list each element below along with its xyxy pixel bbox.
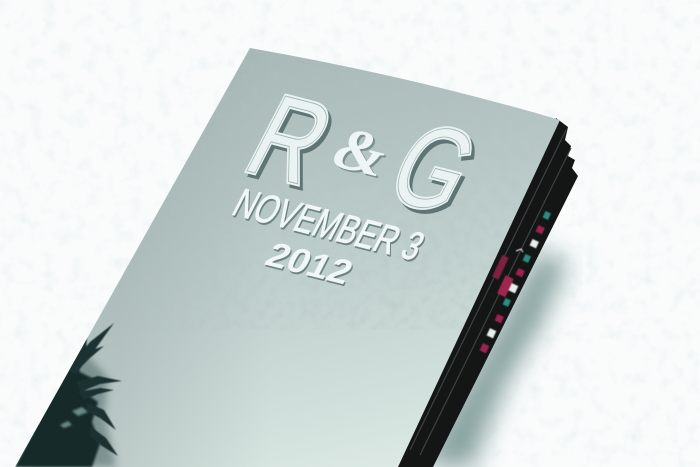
tree soft halo bbox=[30, 352, 116, 467]
letter R: R bbox=[228, 71, 352, 208]
date: 2012: 2012 bbox=[259, 235, 360, 292]
booklet front cover bbox=[15, 48, 560, 467]
letter R: R bbox=[228, 71, 352, 208]
ampersand: & bbox=[323, 116, 404, 191]
letter G: G bbox=[373, 103, 500, 241]
date: November 3: NOVEMBER 3 bbox=[226, 180, 432, 269]
date: November 3: NOVEMBER 3 bbox=[227, 182, 433, 271]
title: R & G bbox=[228, 71, 500, 241]
treetop highlights bbox=[60, 407, 88, 428]
tree spikes bbox=[66, 323, 122, 456]
coloured page tabs bbox=[480, 211, 551, 353]
letter R: R bbox=[231, 75, 355, 212]
letter G: G bbox=[370, 99, 497, 237]
page edge lines bbox=[410, 130, 571, 455]
date: November 3 bbox=[226, 180, 433, 271]
tree body bbox=[15, 356, 100, 467]
cast shadow of booklet bbox=[420, 250, 568, 467]
date: 2012: 2012 bbox=[260, 237, 361, 294]
black inner pages stack bbox=[396, 118, 578, 467]
letter G: G bbox=[370, 99, 497, 237]
ampersand: & bbox=[321, 114, 402, 189]
icon: dark treetop silhouette bbox=[15, 323, 122, 467]
